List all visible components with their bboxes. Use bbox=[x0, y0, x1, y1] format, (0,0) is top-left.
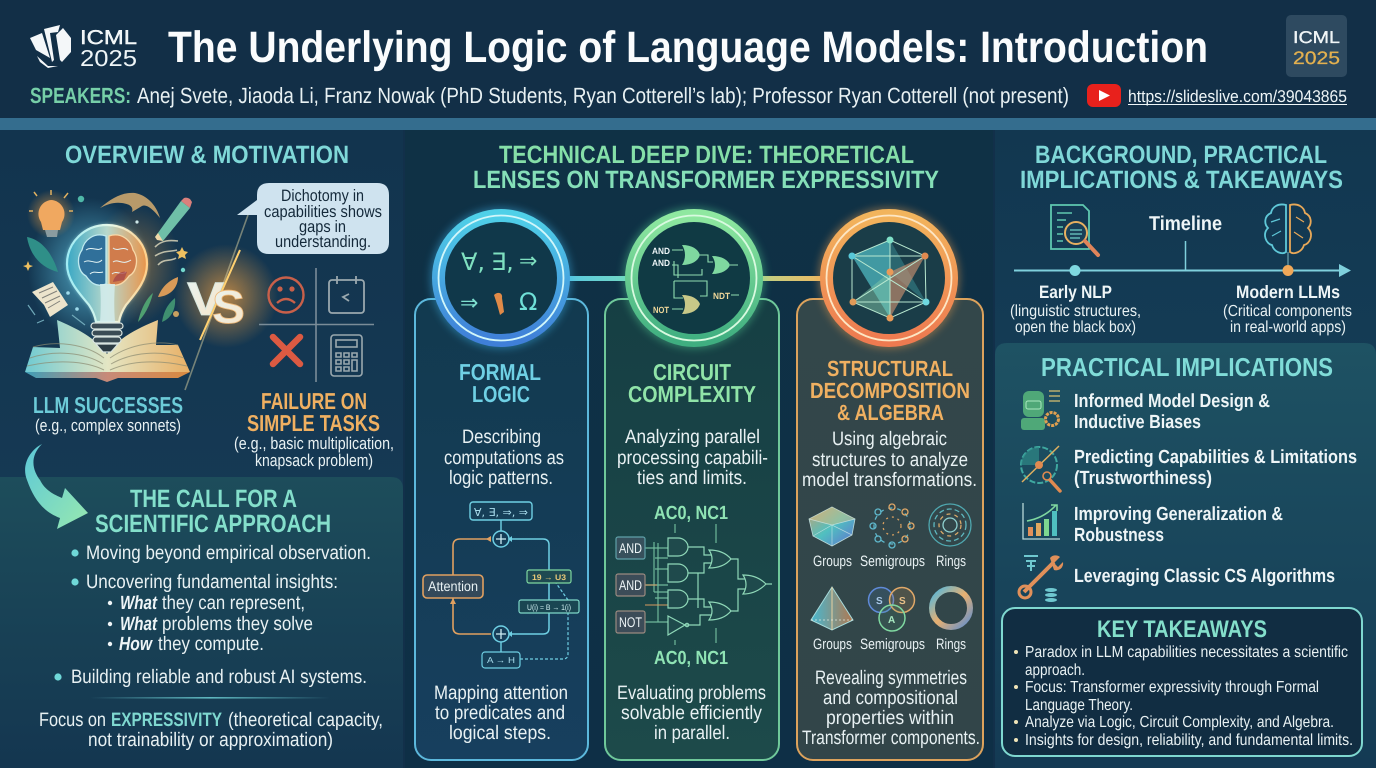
icon: model design bbox=[1021, 391, 1060, 430]
book bbox=[25, 320, 190, 372]
panel: overview & motivation bbox=[0, 130, 403, 768]
focus statement: not trainability or approximation) bbox=[88, 729, 333, 751]
icon: semigroups dots bbox=[870, 504, 914, 548]
description: evaluating problems: in parallel. bbox=[654, 722, 730, 744]
label: failure on simple tasks: SIMPLE TASKS bbox=[247, 410, 380, 436]
heading: call: SCIENTIFIC APPROACH bbox=[95, 510, 331, 538]
gate input: NOT: NOT bbox=[619, 614, 642, 630]
label: failure on simple tasks: (e.g., basic multiplication, bbox=[234, 434, 394, 453]
label: failure on simple tasks: knapsack problem) bbox=[255, 451, 373, 470]
box: predicate B bbox=[519, 600, 579, 613]
speakers line: Anej Svete, Jiaoda Li, Franz Nowak (PhD Students, Ryan Cotterell’s lab); Professor Ryan Cotterell (not present) bbox=[137, 83, 1069, 108]
panel: the call for a scientific approach bbox=[0, 444, 403, 768]
description: circuit complexity: processing capabili- bbox=[617, 447, 768, 469]
box: predicate A bbox=[527, 570, 571, 583]
icon: rings concentric bbox=[929, 504, 971, 546]
takeaways list: Language Theory. bbox=[1025, 697, 1133, 714]
description: circuit complexity bbox=[617, 426, 768, 489]
bullet list: What bbox=[120, 593, 158, 614]
icon: growth chart bbox=[1023, 503, 1060, 539]
video link: https://slideslive.com/39043865 bbox=[1128, 87, 1347, 106]
timeline axis bbox=[1014, 241, 1351, 277]
swoosh bbox=[100, 193, 160, 218]
gate input: AND second: AND bbox=[619, 577, 642, 593]
lens: formal logic circle bbox=[430, 207, 572, 349]
heading: circuit complexity: COMPLEXITY bbox=[628, 381, 756, 407]
callout: dichotomy: Dichotomy in bbox=[281, 187, 364, 205]
panel: technical deep dive bbox=[405, 130, 993, 768]
box: attention bbox=[423, 575, 483, 598]
box: output bbox=[482, 652, 520, 668]
description: revealing symmetries bbox=[802, 667, 980, 749]
description: mapping attention bbox=[434, 682, 568, 744]
bullet list: problems they solve bbox=[162, 613, 313, 635]
description: formal logic: computations as bbox=[444, 447, 564, 469]
description: revealing symmetries: Transformer components. bbox=[802, 727, 980, 749]
lens: formal logic circle: Ω bbox=[519, 288, 537, 316]
label: timeline: Timeline bbox=[1149, 213, 1222, 235]
heading: structural decomposition: & ALGEBRA bbox=[837, 400, 944, 425]
label row: structures top: Semigroups bbox=[860, 553, 925, 570]
item: informed model design: Inductive Biases bbox=[1074, 412, 1201, 433]
box: predicate A: 19 → U3 bbox=[532, 573, 567, 582]
label: early NLP: Early NLP bbox=[1039, 282, 1112, 302]
heading: overview: OVERVIEW & MOTIVATION bbox=[65, 141, 349, 169]
callout: dichotomy: capabilities shows bbox=[264, 203, 382, 221]
panel: key takeaways bbox=[1002, 608, 1362, 756]
bullet list: Moving beyond empirical observation. bbox=[86, 542, 371, 564]
lens: circuit circle: NOT bbox=[653, 305, 669, 315]
box: output: A → H bbox=[487, 655, 515, 665]
icon: gauge bbox=[1021, 446, 1060, 491]
focus statement: Focus on bbox=[39, 709, 106, 731]
description: mapping attention: to predicates and bbox=[435, 702, 565, 724]
icon: groups gem bbox=[809, 507, 855, 546]
label: early NLP: open the black box) bbox=[1015, 319, 1136, 336]
lens: formal logic circle: ⇒ bbox=[460, 291, 478, 316]
card: formal logic bbox=[415, 299, 588, 760]
VS emblem: S bbox=[212, 280, 245, 333]
label: early NLP bbox=[1010, 282, 1141, 336]
lens: circuit circle: NDT bbox=[713, 291, 730, 301]
icon: rings band bbox=[932, 589, 970, 627]
icon: cross bbox=[273, 337, 300, 364]
bullet list: Building reliable and robust AI systems. bbox=[71, 666, 367, 688]
label: failure on simple tasks bbox=[234, 388, 394, 470]
gate input: AND: AND bbox=[619, 540, 642, 556]
heading: structural decomposition: STRUCTURAL bbox=[827, 356, 953, 381]
heading: background bbox=[1020, 141, 1343, 194]
lens: circuit circle: AND bbox=[652, 258, 670, 268]
icon: semigroups venn: S bbox=[876, 596, 883, 607]
box: predicate B: U(i) = B → 1(i) bbox=[527, 603, 571, 612]
screw base bbox=[91, 323, 123, 352]
item: leveraging classic algorithms bbox=[1019, 555, 1335, 602]
icon: sad face bbox=[268, 278, 304, 312]
leaves and papers bbox=[27, 237, 58, 272]
description: revealing symmetries: Revealing symmetries bbox=[815, 667, 967, 689]
bullet list: How bbox=[119, 634, 153, 655]
ICML badge right: ICML bbox=[1293, 28, 1340, 47]
icon: semigroups venn: A bbox=[888, 615, 895, 626]
label: LLM successes bbox=[33, 392, 183, 435]
label: LLM successes: (e.g., complex sonnets) bbox=[35, 416, 181, 435]
heading: structural decomposition: DECOMPOSITION bbox=[810, 378, 970, 403]
label row: structures top bbox=[813, 553, 966, 570]
callout: dichotomy bbox=[237, 183, 389, 254]
icon: document magnifier bbox=[1051, 205, 1098, 255]
description: formal logic: logic patterns. bbox=[449, 467, 553, 489]
callout: dichotomy: understanding. bbox=[275, 233, 371, 251]
description: evaluating problems bbox=[617, 682, 766, 744]
illustration: lightbulb and open book bbox=[23, 190, 192, 382]
lens: algebra circle bbox=[818, 207, 960, 349]
bulb glass bbox=[67, 225, 147, 322]
header band bbox=[0, 0, 1376, 118]
description: mapping attention: logical steps. bbox=[449, 722, 551, 744]
label row: structures bottom: Rings bbox=[936, 636, 966, 653]
VS emblem bbox=[174, 215, 278, 390]
icon: semigroups venn: S bbox=[899, 596, 906, 607]
description: circuit complexity: ties and limits. bbox=[637, 467, 747, 489]
label: modern LLMs: in real-world apps) bbox=[1230, 319, 1346, 336]
pencil bbox=[155, 201, 190, 241]
ICML badge right: 2025 bbox=[1293, 48, 1340, 68]
description: revealing symmetries: and compositional bbox=[823, 687, 958, 709]
description: revealing symmetries: properties within bbox=[826, 707, 954, 729]
callout: dichotomy: gaps in bbox=[299, 218, 346, 236]
description: mapping attention: Mapping attention bbox=[434, 682, 568, 704]
icon: wrench and database bbox=[1019, 555, 1063, 602]
heading: formal logic bbox=[459, 359, 541, 407]
item: improving generalization: Robustness bbox=[1074, 525, 1164, 546]
description: algebraic structures: model transformations. bbox=[802, 469, 977, 491]
item: improving generalization: Improving Generalization & bbox=[1074, 504, 1283, 525]
takeaways list: Focus: Transformer expressivity through Formal bbox=[1025, 679, 1319, 696]
title: The Underlying Logic of Language Models: Introduction bbox=[168, 23, 1208, 72]
item: informed model design bbox=[1021, 391, 1270, 433]
label: failure on simple tasks: FAILURE ON bbox=[261, 388, 367, 414]
heading: formal logic: LOGIC bbox=[472, 381, 530, 407]
heading: background: IMPLICATIONS & TAKEAWAYS bbox=[1020, 166, 1343, 194]
ICML logo left: ICML bbox=[80, 27, 137, 49]
label row: structures bottom: Groups bbox=[813, 636, 852, 653]
heading: structural decomposition bbox=[810, 356, 970, 425]
lens: formal logic circle: ∀, bbox=[461, 248, 485, 276]
item: predicting capabilities: (Trustworthiness) bbox=[1074, 468, 1212, 489]
diagram: logic circuit bbox=[616, 524, 772, 645]
description: evaluating problems: solvable efficiently bbox=[621, 702, 762, 724]
description: algebraic structures bbox=[802, 428, 977, 491]
ICML badge right bbox=[1286, 15, 1347, 77]
bullet list: they can represent, bbox=[162, 592, 305, 614]
panel: practical implications bbox=[995, 343, 1376, 768]
diagram: attention logic flow bbox=[423, 502, 579, 668]
ICML logo left: 2025 bbox=[80, 45, 137, 71]
heading: formal logic: FORMAL bbox=[459, 359, 541, 385]
bullet list: What bbox=[120, 614, 158, 635]
label: early NLP: (linguistic structures, bbox=[1010, 303, 1141, 320]
bullet list bbox=[54, 542, 371, 688]
icon: brain bbox=[1265, 204, 1311, 253]
label: modern LLMs: (Critical components bbox=[1223, 303, 1352, 320]
gate input: NOT bbox=[616, 611, 645, 633]
label row: structures bottom bbox=[813, 636, 966, 653]
icon: YouTube bbox=[1087, 84, 1121, 107]
gate input: AND second bbox=[616, 574, 645, 596]
takeaways list: approach. bbox=[1025, 662, 1085, 679]
description: algebraic structures: structures to analyze bbox=[812, 449, 968, 471]
failure icons grid bbox=[259, 268, 374, 382]
lens: formal logic circle: ∃, bbox=[491, 248, 514, 276]
description: algebraic structures: Using algebraic bbox=[832, 428, 947, 450]
connector between lenses bbox=[565, 276, 827, 281]
heading: technical deep dive: TECHNICAL DEEP DIVE: THEORETICAL bbox=[499, 141, 914, 169]
label row: structures top: Groups bbox=[813, 553, 852, 570]
heading: call: THE CALL FOR A bbox=[130, 485, 297, 513]
label: AC0 NC1 bottom: AC0, NC1 bbox=[654, 648, 728, 669]
heading: background: BACKGROUND, PRACTICAL bbox=[1035, 141, 1327, 169]
bullet list: Uncovering fundamental insights: bbox=[86, 571, 338, 593]
label: modern LLMs: Modern LLMs bbox=[1236, 282, 1340, 302]
heading: technical deep dive: LENSES ON TRANSFORMER EXPRESSIVITY bbox=[473, 166, 939, 194]
label: modern LLMs bbox=[1223, 282, 1352, 336]
brain bbox=[79, 235, 106, 285]
label row: structures bottom: Semigroups bbox=[860, 636, 925, 653]
card: structural decomposition & algebra bbox=[797, 299, 983, 760]
icon: groups pyramid bbox=[811, 587, 853, 630]
heading: call bbox=[95, 485, 331, 538]
box: quantifiers bbox=[470, 502, 532, 520]
focus statement bbox=[39, 709, 383, 751]
lens: circuit circle bbox=[623, 207, 765, 349]
VS emblem: V bbox=[187, 272, 225, 325]
icon: calculator bbox=[331, 335, 362, 376]
ICML logo left bbox=[30, 25, 137, 71]
item: predicting capabilities bbox=[1021, 446, 1357, 491]
arrow: curved bbox=[25, 444, 88, 529]
description: circuit complexity: Analyzing parallel bbox=[625, 426, 760, 448]
heading: circuit complexity: CIRCUIT bbox=[653, 359, 731, 385]
takeaways list bbox=[1014, 644, 1353, 749]
small lamp bbox=[27, 190, 75, 238]
lens: formal logic circle: ⇒ bbox=[519, 249, 537, 274]
card: circuit complexity bbox=[605, 299, 779, 760]
gate input: AND bbox=[616, 537, 645, 559]
heading: circuit complexity bbox=[628, 359, 756, 407]
description: formal logic: Describing bbox=[462, 426, 541, 448]
label: AC0 NC1 top: AC0, NC1 bbox=[654, 503, 728, 524]
description: formal logic bbox=[444, 426, 564, 489]
speakers line: SPEAKERS: bbox=[30, 83, 131, 108]
panel: background & timeline bbox=[995, 130, 1376, 768]
focus statement: EXPRESSIVITY bbox=[111, 709, 222, 731]
bullet list: they compute. bbox=[158, 633, 264, 655]
box: attention: Attention bbox=[428, 578, 478, 594]
heading: practical implications: PRACTICAL IMPLICATIONS bbox=[1041, 352, 1333, 382]
takeaways list: Analyze via Logic, Circuit Complexity, and Algebra. bbox=[1025, 714, 1334, 731]
description: evaluating problems: Evaluating problems bbox=[617, 682, 766, 704]
item: leveraging classic algorithms: Leveraging Classic CS Algorithms bbox=[1074, 566, 1335, 587]
label: LLM successes: LLM SUCCESSES bbox=[33, 392, 183, 418]
heading: technical deep dive bbox=[473, 141, 939, 194]
lens: circuit circle: AND bbox=[652, 246, 670, 256]
icon: semigroups venn bbox=[868, 588, 914, 631]
item: informed model design: Informed Model Design & bbox=[1074, 391, 1270, 412]
heading: key takeaways: KEY TAKEAWAYS bbox=[1097, 616, 1267, 643]
label row: structures top: Rings bbox=[936, 553, 966, 570]
item: improving generalization bbox=[1023, 503, 1283, 546]
box: quantifiers: ∀, ∃, ⇒, ⇒ bbox=[474, 506, 528, 519]
icon: calendar bbox=[329, 276, 364, 313]
focus statement: (theoretical capacity, bbox=[228, 709, 383, 731]
